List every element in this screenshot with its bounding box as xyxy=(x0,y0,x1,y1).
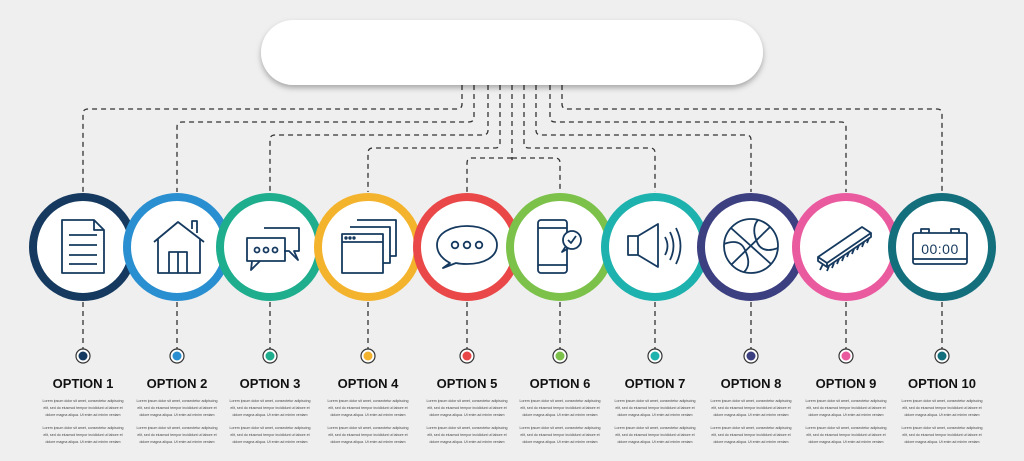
icon: speech bubble xyxy=(437,226,497,268)
option labels: OPTION 9 xyxy=(816,376,876,391)
icon: phone check xyxy=(538,220,581,273)
icons xyxy=(62,219,967,273)
icon: house xyxy=(154,221,204,273)
icon: digital clock: 00:00 xyxy=(921,241,959,257)
description texts: elit, sed do eiusmod tempor incididunt ut labore et xyxy=(43,433,123,437)
description texts: Lorem ipsum dolor sit amet, consectetur adipiscing xyxy=(43,426,123,430)
icon: document xyxy=(62,220,104,273)
connector lines xyxy=(83,85,942,349)
option labels: OPTION 8 xyxy=(721,376,781,391)
option labels xyxy=(53,376,976,391)
option labels: OPTION 4 xyxy=(338,376,399,391)
dots xyxy=(76,349,949,363)
option labels: OPTION 7 xyxy=(625,376,685,391)
icon: speaker xyxy=(628,224,680,267)
icon: digital clock xyxy=(913,229,967,264)
icon: chat bubbles xyxy=(247,228,299,270)
option labels: OPTION 6 xyxy=(530,376,590,391)
option labels: OPTION 3 xyxy=(240,376,300,391)
option labels: OPTION 10 xyxy=(908,376,976,391)
option labels: OPTION 1 xyxy=(53,376,113,391)
icon: windows xyxy=(342,220,396,273)
description texts: dolore magna aliqua. Ut enim ad minim veniam xyxy=(45,413,121,417)
description texts: dolore magna aliqua. Ut enim ad minim veniam xyxy=(45,440,121,444)
option labels: OPTION 2 xyxy=(147,376,207,391)
description texts xyxy=(43,399,982,444)
description texts: Lorem ipsum dolor sit amet, consectetur adipiscing xyxy=(43,399,123,403)
circles xyxy=(33,197,992,297)
description texts: elit, sed do eiusmod tempor incididunt ut labore et xyxy=(43,406,123,410)
title pill xyxy=(261,20,763,85)
option labels: OPTION 5 xyxy=(437,376,497,391)
icon: basketball xyxy=(724,219,778,273)
icon: chip xyxy=(818,227,871,271)
